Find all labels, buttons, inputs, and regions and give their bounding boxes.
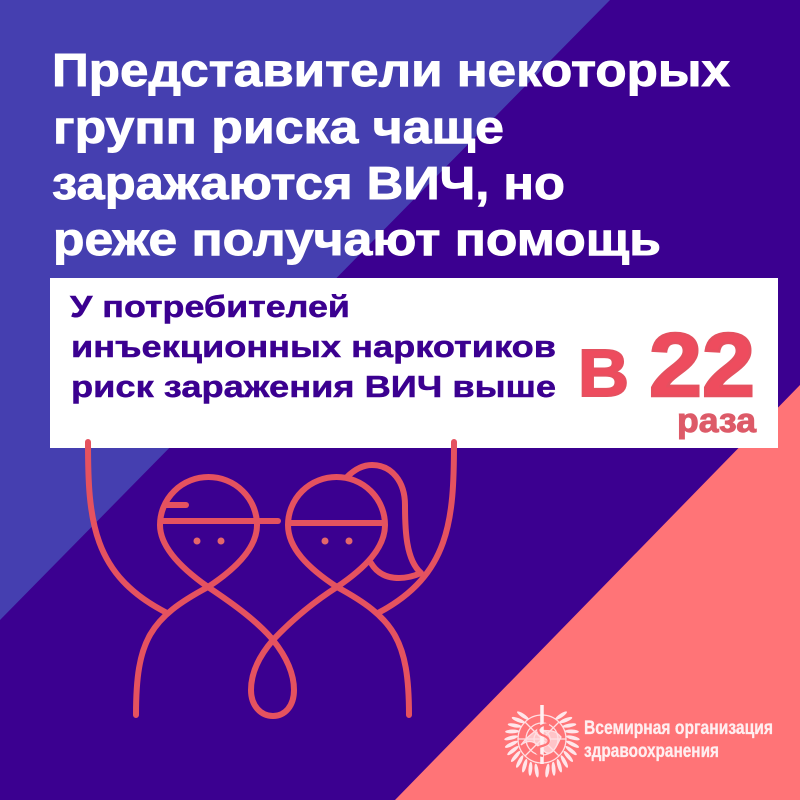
statistic value: in 22 times: В [578,336,629,411]
right hair band [290,520,384,526]
statistic description text: риск заражения ВИЧ выше [71,369,556,404]
emblem globe [518,715,566,763]
right eyes [322,538,352,544]
left arm [88,442,167,613]
statistic description text: инъекционных наркотиков [71,329,556,364]
emblem left laurel [504,710,539,778]
right arm [378,442,454,613]
statistic description text [70,289,556,404]
left cap stripe [166,502,186,508]
logo: WHO emblem [504,705,580,778]
illustration: two people holding the card [88,442,454,716]
outline: left body, head and central loop [136,477,409,716]
statistic value: in 22 times: 22 [649,316,755,416]
background: periwinkle diagonal [0,0,610,620]
background: coral diagonal [395,385,800,800]
emblem right laurel [545,710,580,778]
logo text [584,718,773,762]
statistic value: in 22 times [578,316,757,440]
title: реже получают помощь [53,213,661,265]
statistic description text: У потребителей [70,289,350,324]
left eyes [194,538,224,544]
logo text: здравоохранения [584,741,719,762]
title: заражаются ВИЧ, но [52,157,565,209]
emblem staff and serpent [536,705,549,764]
title: Представители некоторых [52,44,730,96]
panel: white statistic card [50,278,778,448]
title [52,44,730,265]
title: групп риска чаще [53,101,504,153]
ponytail [347,465,421,578]
statistic value: in 22 times: раза [677,402,757,440]
left cap brim [161,518,278,524]
